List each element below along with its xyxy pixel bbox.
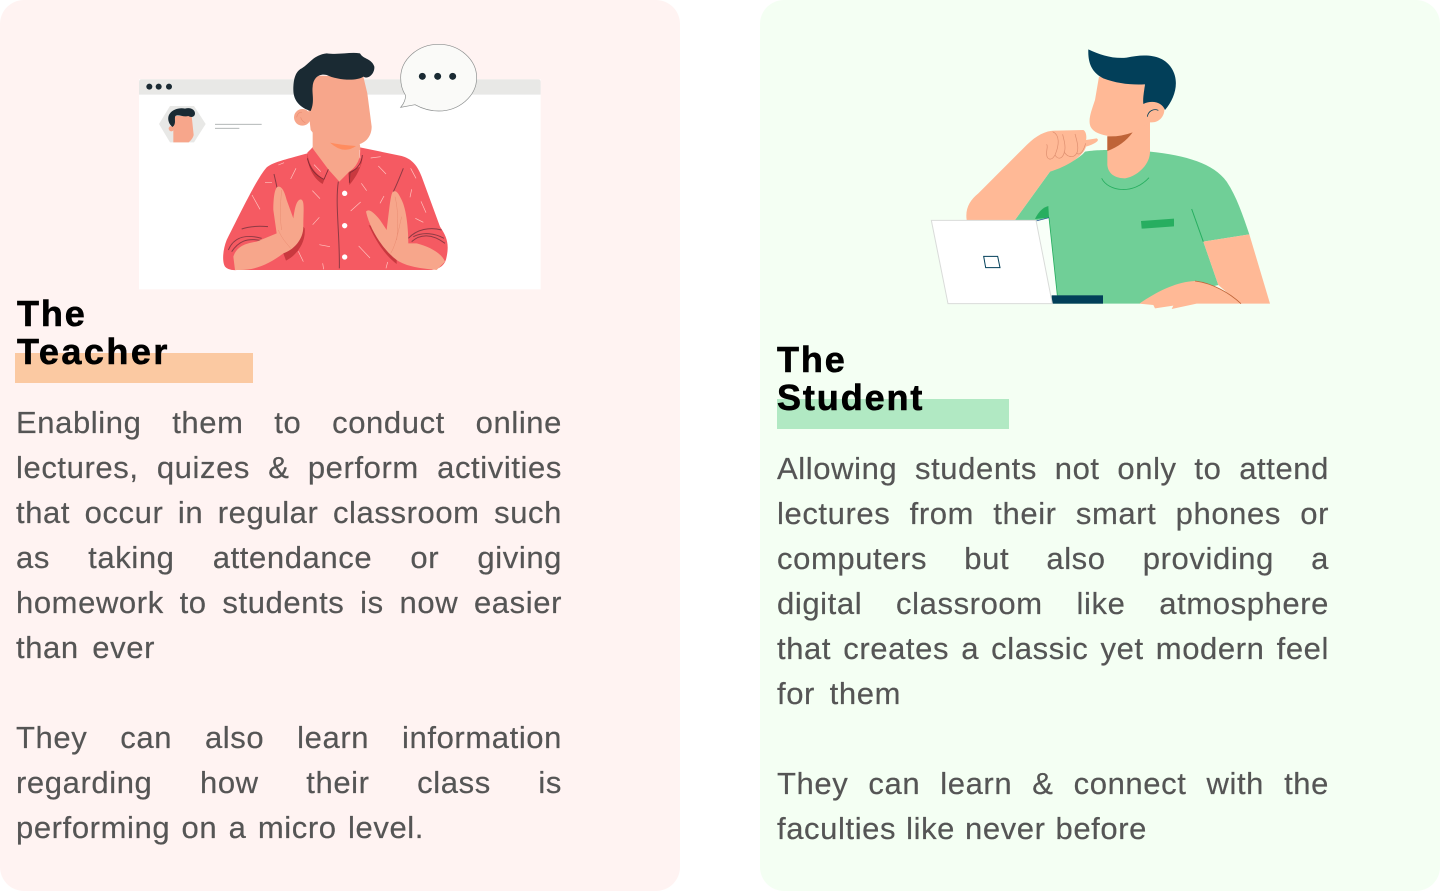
text block: teacher description: than ever [16,630,155,665]
heading highlight [15,353,253,383]
heading: The Teacher [17,293,170,372]
text block: student description: They can learn & connect with the [777,766,1329,801]
text block: teacher description: as taking attendance or giving [16,540,562,575]
text block: student description: lectures from their smart phones or [777,496,1329,531]
text block: teacher description: that occur in regular classroom such [16,495,562,530]
teacher figure [223,53,448,270]
text block: student description: Allowing students not only to attend [777,451,1329,486]
heading: The Teacher: The [17,293,87,334]
text block: student description: that creates a classic yet modern feel [777,631,1329,666]
heading: The Student [777,339,924,418]
panel: student [760,0,1440,891]
text placeholder lines [215,124,262,128]
text block: teacher description: regarding how their class is [16,765,562,800]
browser window [139,79,541,289]
heading: The Student: The [777,339,847,380]
illustration: student with laptop [930,49,1270,309]
text block: teacher description: They can also learn information [16,720,562,755]
text block: teacher description: Enabling them to conduct online [16,405,562,440]
text block: student description: digital classroom like atmosphere [777,586,1329,621]
text block: student description: faculties like never before [777,811,1147,846]
icon: mini avatar [159,106,206,142]
text block: student description [777,451,1329,846]
text block: teacher description: homework to students is now easier [16,585,562,620]
text block: student description: for them [777,676,901,711]
text block: teacher description: lectures, quizes & perform activities [16,450,562,485]
heading: The Teacher: Teacher [17,331,170,372]
speech bubble [401,44,477,111]
text block: student description: computers but also providing a [777,541,1329,576]
illustration: teacher on a video call [139,44,540,290]
laptop [931,206,1103,304]
student figure [966,49,1270,309]
panel: teacher [0,0,680,891]
text block: teacher description [16,405,562,845]
text block: teacher description: performing on a micro level. [16,810,424,845]
heading: The Student: Student [777,377,924,418]
heading highlight [777,399,1009,429]
